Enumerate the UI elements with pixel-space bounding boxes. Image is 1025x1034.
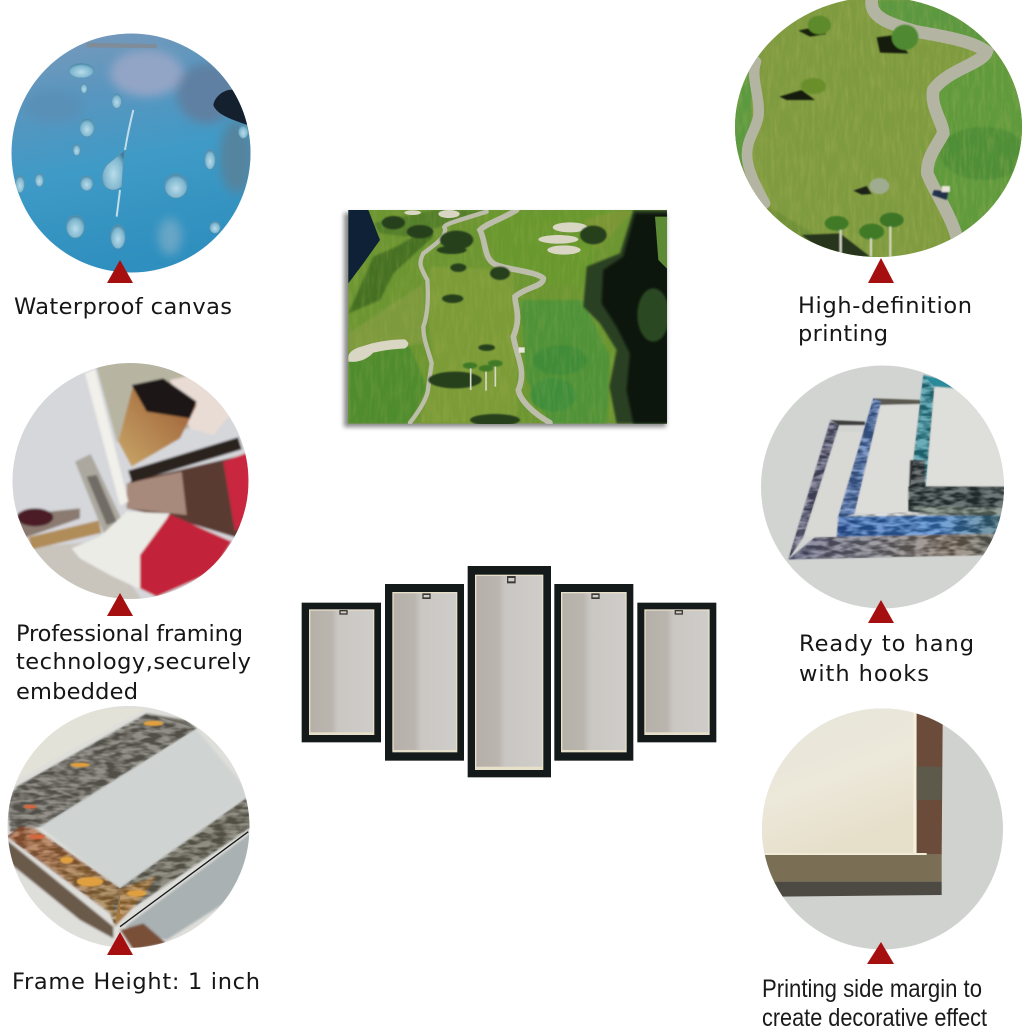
label: high-definition printing — [798, 293, 972, 347]
label: printing side margin: Printing side margin to — [762, 975, 982, 1003]
marker triangle — [868, 258, 894, 283]
marker triangle — [107, 932, 133, 955]
panel: frame height — [3, 703, 260, 995]
label: professional framing: Professional framing — [16, 621, 243, 647]
panel: professional framing — [7, 358, 253, 705]
marker triangle — [107, 593, 133, 616]
grass mowing texture — [730, 0, 1025, 263]
frame 2 — [385, 584, 464, 761]
frame edge paint texture — [7, 713, 252, 927]
frame 5 — [637, 603, 716, 742]
panel: printing side margin — [757, 703, 1010, 1032]
photo: hands framing with nail gun — [7, 358, 253, 605]
center image: golf course canvas — [344, 210, 669, 427]
panel: ready to hang — [758, 362, 1008, 687]
photo: water droplets on blue canvas — [7, 30, 257, 277]
frame edge paint texture — [788, 375, 1008, 559]
panel: waterproof canvas — [7, 30, 257, 320]
label: professional framing: embedded — [16, 679, 138, 705]
grass mowing texture — [348, 210, 615, 423]
photo: frame corner with orange edges — [3, 703, 253, 953]
label: ready to hang: Ready to hang — [799, 631, 974, 657]
marker triangle — [868, 600, 894, 623]
frame 3 — [468, 566, 551, 777]
label: waterproof canvas: Waterproof canvas — [14, 294, 232, 320]
label: professional framing — [16, 621, 251, 705]
label: professional framing: technology,securely — [16, 649, 251, 675]
panel: five-piece frames back view — [302, 566, 716, 777]
label: printing side margin: create decorative effect — [762, 1004, 987, 1032]
label: ready to hang: with hooks — [799, 661, 929, 687]
label: ready to hang — [799, 631, 974, 687]
label: frame height: Frame Height: 1 inch — [12, 969, 260, 995]
shoreline vegetation — [583, 210, 668, 423]
label: high-definition printing: printing — [798, 321, 888, 347]
photo: golf course close-up — [730, 0, 1025, 263]
panel: high-definition printing — [730, 0, 1025, 347]
frame 1 — [302, 603, 381, 742]
marker triangle — [107, 260, 133, 283]
label: printing side margin — [762, 975, 987, 1032]
photo: stacked canvases with hooks — [758, 362, 1008, 612]
label: high-definition printing: High-definition — [798, 293, 972, 319]
marker triangle — [867, 942, 894, 964]
photo: canvas back corner — [757, 703, 1010, 953]
frame 4 — [554, 584, 633, 761]
